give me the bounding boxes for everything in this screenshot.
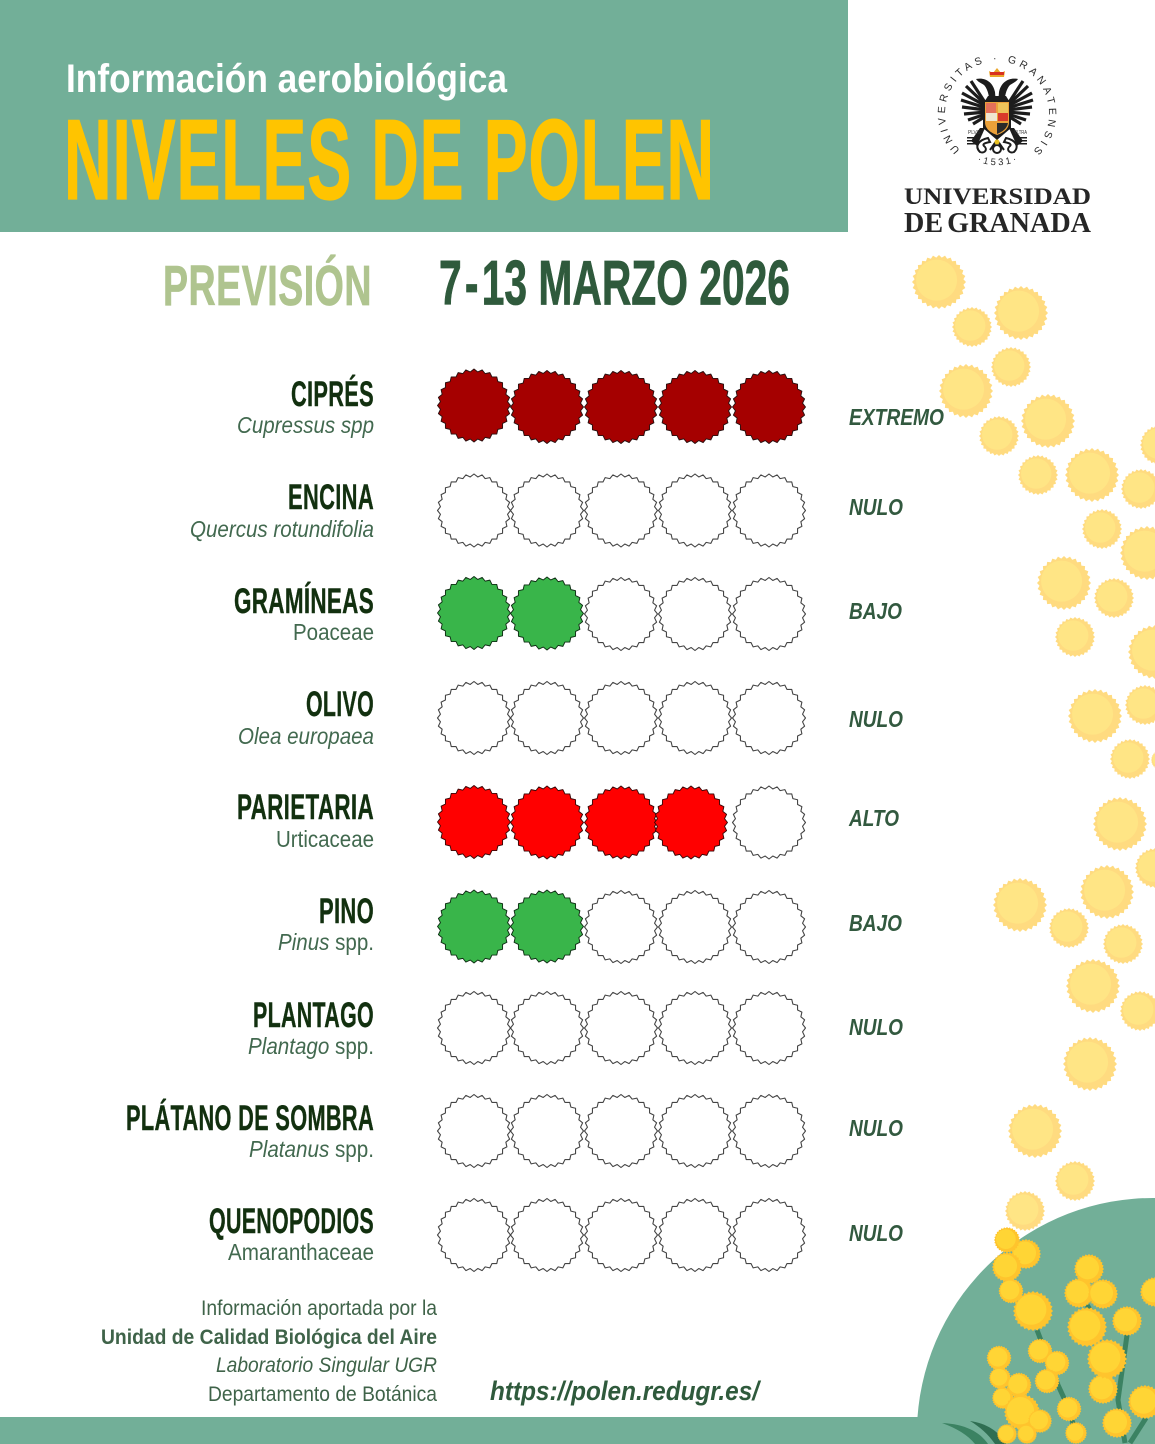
decoration: pale pollen over hill (1005, 1191, 1045, 1231)
seal motto: VLTRA (1014, 130, 1028, 136)
row: Quenopodios (209, 1198, 903, 1272)
pollen name: PLANTAGO (253, 996, 374, 1035)
row: Plantago (248, 992, 903, 1064)
seal eagle (961, 79, 1033, 153)
panel: header banner (0, 0, 848, 232)
row: Ciprés (237, 369, 944, 444)
logo wordmark (904, 184, 1092, 239)
level indicator (438, 682, 806, 754)
heading: forecast dates: 7-13 MARZO 2026 (439, 248, 790, 318)
level indicator (438, 369, 806, 444)
pollen name: PLÁTANO DE SOMBRA (126, 1098, 374, 1138)
header subtitle: Información aerobiológica (66, 57, 508, 101)
row: Gramíneas (234, 576, 902, 650)
illustration: mimosa branches (942, 1227, 1155, 1444)
row: Encina (190, 474, 903, 547)
scientific name: Quercus rotundifolia (190, 516, 374, 542)
row: Plátano de sombra (126, 1094, 903, 1168)
row: Pino (278, 890, 902, 964)
level label: EXTREMO (849, 404, 944, 430)
decoration: pale floating pollen (912, 255, 1155, 1201)
pollen name: PINO (319, 892, 374, 931)
footer band and green hill (0, 1198, 1155, 1444)
level label: ALTO (848, 805, 899, 831)
scientific name: Platanus spp. (249, 1136, 374, 1162)
level label: NULO (849, 1115, 903, 1141)
footer credits (101, 1297, 437, 1406)
level indicator (438, 576, 806, 650)
scientific name: Olea europaea (238, 723, 374, 749)
stems and leaves (942, 1305, 1146, 1444)
logo wordmark: UNIVERSIDAD (904, 184, 1091, 209)
pollen name: ENCINA (288, 478, 374, 517)
heading: forecast label: PREVISIÓN (163, 254, 372, 318)
level label: BAJO (849, 910, 902, 936)
blossoms (986, 1227, 1155, 1444)
scientific name: Urticaceae (276, 826, 374, 852)
credit line 2: Unidad de Calidad Biológica del Aire (101, 1326, 437, 1349)
logo: Universidad de Granada (904, 56, 1092, 239)
level label: NULO (849, 1014, 903, 1040)
scientific name: Pinus spp. (278, 929, 374, 955)
level label: NULO (849, 1220, 903, 1246)
level label: BAJO (849, 598, 902, 624)
credit line 1: Información aportada por la (201, 1297, 437, 1320)
pollen name: OLIVO (306, 685, 374, 724)
level label: NULO (849, 494, 903, 520)
pollen name: GRAMÍNEAS (234, 581, 374, 621)
seal shield (985, 102, 1009, 144)
level indicator (438, 992, 806, 1064)
credit line 3: Laboratorio Singular UGR (216, 1354, 437, 1377)
seal motto (968, 130, 1028, 136)
level indicator (438, 1198, 806, 1272)
scientific name: Cupressus spp (237, 412, 374, 438)
pollen name: PARIETARIA (237, 788, 374, 827)
scientific name: Amaranthaceae (228, 1239, 374, 1265)
pollen name: QUENOPODIOS (209, 1202, 374, 1241)
logo wordmark: DE GRANADA (904, 208, 1092, 239)
scientific name: Poaceae (293, 619, 374, 645)
website link: https://polen.redugr.es/ (490, 1376, 761, 1406)
credit line 4: Departamento de Botánica (208, 1383, 437, 1406)
level indicator (438, 890, 806, 964)
seal motto: PLVS (968, 130, 981, 136)
row: Olivo (238, 682, 903, 754)
seal ring text: · 1 5 3 1 · (978, 157, 1016, 166)
seal ring text: UNIVERSITAS · GRANATENSIS (938, 56, 1056, 154)
pollen name: CIPRÉS (291, 374, 374, 414)
seal crown (989, 68, 1005, 77)
level indicator (438, 1094, 806, 1168)
level indicator (438, 786, 806, 859)
level indicator (438, 474, 806, 547)
level label: NULO (849, 706, 903, 732)
row: Parietaria (237, 786, 899, 859)
scientific name: Plantago spp. (248, 1033, 374, 1059)
